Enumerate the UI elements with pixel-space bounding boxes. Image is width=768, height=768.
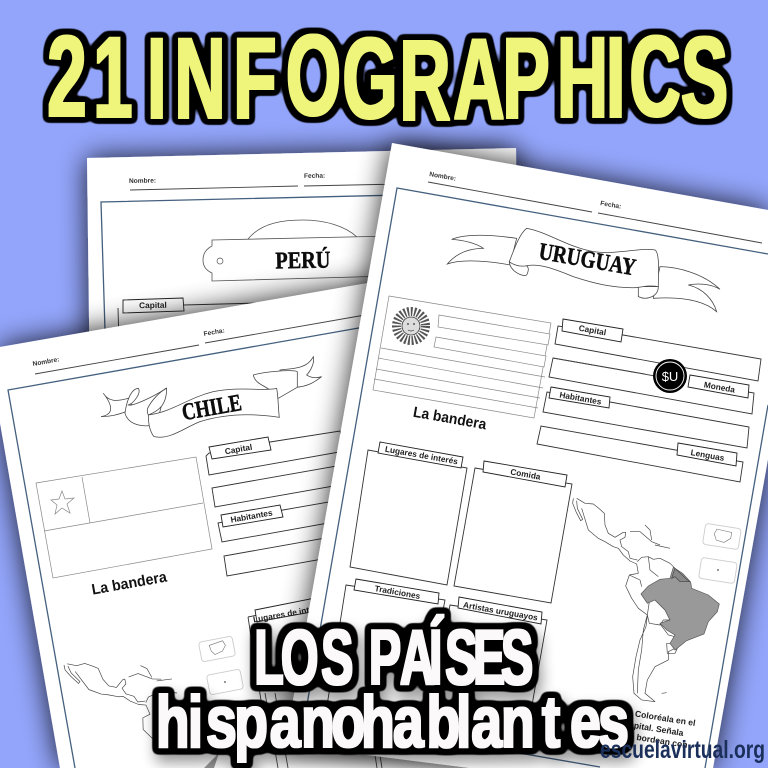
map: Chile highlighted [204, 750, 220, 768]
instructions text [618, 709, 696, 750]
panel: Tradiciones (Uruguay) [326, 579, 445, 730]
panel: Moneda (Uruguay) [549, 358, 754, 414]
panel: Lenguas (Uruguay) [537, 426, 743, 482]
panel: Comida (Uruguay): Comida [510, 466, 542, 482]
banner: Chile [101, 357, 322, 437]
panel: Capital (Perú) [118, 298, 260, 345]
panel: Lugares de interés (Chile) [248, 595, 333, 745]
worksheet: Perú: Nombre: [129, 178, 156, 185]
panel: Habitantes (Chile) [218, 500, 345, 542]
icon: coin $U [653, 359, 687, 393]
worksheet: Perú [87, 148, 520, 400]
banner: Perú [203, 220, 392, 281]
mini card: España (Chile) [198, 636, 236, 662]
panel: Capital (Chile): Capital [224, 442, 253, 456]
panel: Capital (Perú): Capital [139, 300, 167, 310]
mini card: España (Uruguay) [703, 523, 741, 550]
panel: Lenguas (Uruguay): Lenguas [690, 447, 726, 463]
panel: Comida (Uruguay) [454, 461, 572, 603]
icon: sol de mayo [396, 312, 426, 340]
panel: Tradiciones (Uruguay): Tradiciones [374, 583, 421, 601]
instructions text: que bordean con [618, 729, 688, 750]
panel: Lugares de interés (Uruguay) [350, 442, 467, 585]
icon: coin $U: $U [662, 369, 678, 384]
worksheet: Chile [0, 260, 590, 768]
panel: Capital (Chile) [206, 431, 345, 475]
panel: Artistas uruguayos (Uruguay) [428, 597, 547, 745]
panel: Habitantes (Uruguay) [543, 387, 749, 448]
title: URUGUAY: URUGUAY [537, 239, 638, 281]
worksheet: Chile: Nombre: [32, 356, 60, 368]
heading: LOS PAÍSES: LOS PAÍSES [254, 613, 533, 701]
worksheet: Uruguay: Nombre: [429, 171, 457, 183]
panel: box 2 (Chile) [224, 535, 345, 576]
map: América Latina with Brazil highlighted [573, 498, 719, 702]
instructions text: capital. Señala [624, 719, 684, 738]
panel: Capital (Uruguay): Capital [578, 323, 607, 337]
instructions text: Coloréala en el [634, 709, 696, 728]
title: CHILE: CHILE [180, 390, 244, 426]
label: La bandera (Uruguay): La bandera [412, 404, 488, 433]
flag: Chile [36, 457, 212, 578]
mini card: Canarias (Uruguay) [699, 557, 737, 584]
worksheet: Uruguay: Fecha: [600, 200, 622, 211]
panel: Lugares de interés (Uruguay): Lugares de interés [384, 444, 459, 466]
banner: Perú: PERÚ [275, 248, 331, 274]
flag: Uruguay [373, 296, 551, 418]
banner: Uruguay [447, 228, 720, 312]
heading: 21 INFOGRAPHICS: 21 INFOGRAPHICS [47, 12, 728, 145]
worksheet: Uruguay [285, 143, 768, 768]
panel: lower boxes (Chile) [265, 693, 382, 768]
label: La bandera (Chile): La bandera [90, 568, 169, 599]
panel: Lugares de interés (Chile): Lugares de interés [252, 602, 327, 624]
worksheet: Chile: Fecha: [203, 327, 225, 338]
panel: Moneda (Uruguay): Moneda [703, 379, 736, 395]
worksheet: Perú: Fecha: [304, 173, 325, 180]
map: América Latina (Chile) [63, 632, 189, 759]
heading: hispanohablantes: hispanohablantes [156, 681, 629, 763]
panel: Artistas uruguayos (Uruguay): Artistas uruguayos [462, 600, 539, 623]
panel: Capital (Uruguay) [555, 319, 761, 381]
panel: Habitantes (Chile): Habitantes [230, 507, 274, 525]
mini card: Canarias (Chile) [206, 669, 244, 695]
panel: Habitantes (Uruguay): Habitantes [559, 389, 603, 407]
panel: box (Chile) [212, 465, 345, 507]
